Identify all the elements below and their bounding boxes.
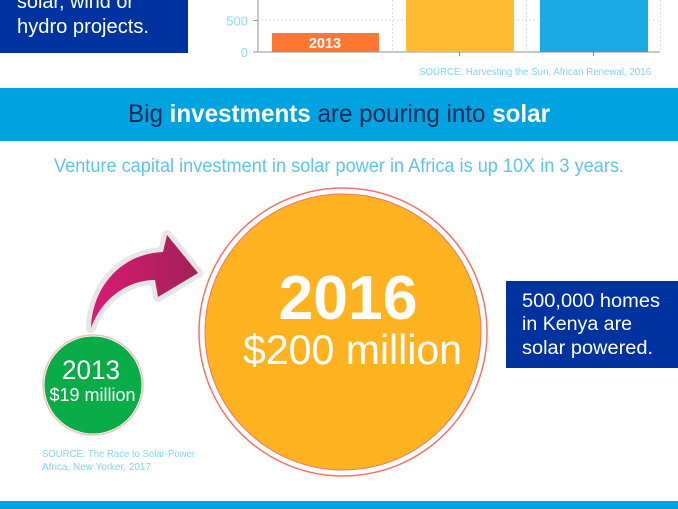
bar chart: [226, 0, 660, 60]
source: chart: SOURCE: Harvesting the Sun, African Renewal, 2016: [419, 67, 651, 78]
source: investment: Africa, New Yorker, 2017: [42, 462, 151, 473]
section heading band: Big investments are pouring into solar: [128, 100, 550, 128]
callout: homes in Kenya: 500,000 homes: [522, 291, 660, 312]
callout: solar, wind or hydro projects: hydro projects.: [17, 16, 149, 38]
source: investment: [42, 449, 196, 473]
bar: yellow: [406, 0, 514, 52]
callout: solar, wind or hydro projects: [0, 0, 188, 53]
callout: homes in Kenya: solar powered.: [522, 338, 653, 359]
bar: 2013: [272, 33, 379, 52]
source: investment: SOURCE: The Race to Solar-Power: [42, 449, 196, 460]
bar: 2013: 2013: [309, 36, 341, 52]
circle: 2013: $19 million: [50, 385, 136, 405]
circle: 2016: 2016: [278, 264, 418, 333]
y-axis labels: 0: [241, 45, 248, 60]
callout: homes in Kenya: [506, 281, 678, 368]
subheading: Venture capital investment in solar power in Africa is up 10X in 3 years.: [54, 156, 624, 177]
section heading band: [0, 88, 678, 141]
circle: 2016: $200 million: [243, 326, 462, 373]
circle: 2013: [43, 335, 143, 435]
circle: 2013: 2013: [62, 355, 120, 385]
callout: homes in Kenya: in Kenya are: [522, 314, 632, 335]
circle: 2016: [199, 188, 487, 476]
y-axis labels: 500: [226, 14, 248, 28]
y-axis labels: [226, 14, 248, 60]
bar: blue: [540, 0, 648, 52]
footer band: [0, 501, 678, 509]
arrow: [91, 235, 198, 328]
